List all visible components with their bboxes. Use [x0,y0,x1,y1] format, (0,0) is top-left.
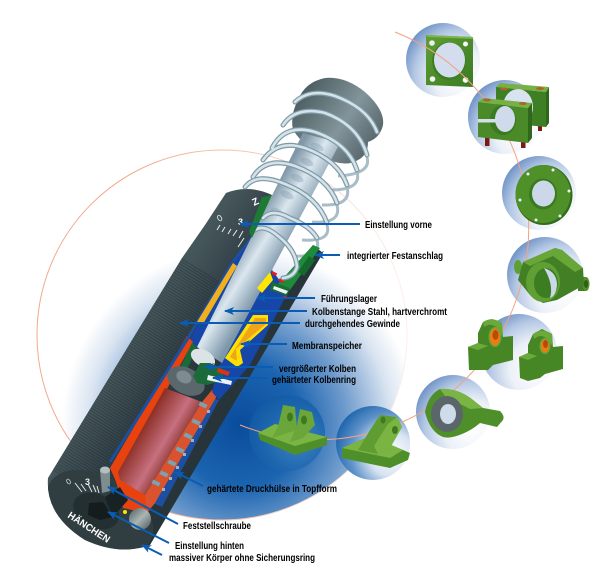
accessory: right bearing block [519,329,563,381]
side grub screw [123,508,151,530]
piston rod [197,133,340,363]
accessory: rod eye [425,389,504,438]
hex adjustment socket [88,502,113,520]
labels [169,220,448,564]
front adjustment scale [215,195,272,247]
labels: gehärtete Druckhülse in Topfform [207,484,337,495]
right wall blue band [153,398,219,507]
labels: integrierter Festanschlag [347,251,443,262]
green piston [193,363,225,385]
labels: Feststellschraube [183,521,251,532]
accessory ring line [240,32,529,440]
base end face [48,470,153,550]
left green seal [180,343,197,372]
accessory: clevis bracket left [258,405,327,455]
spring highlight [245,93,377,278]
accessory backing circles [249,23,583,480]
rear adjustment scale and brand: HÄNCHEN [65,509,113,546]
guide bearing and green end stop [270,245,320,298]
front adjustment scale: 3 [238,217,243,227]
spring front coils [245,93,377,278]
labels: durchgehendes Gewinde [305,319,400,330]
blue interior left of rod [183,236,257,362]
accessory: square flange [426,35,473,87]
hydraulic cylinder [118,388,202,495]
pressure sleeve wall [145,387,222,512]
piston head [162,345,218,402]
front adjustment scale: 0 [215,213,224,224]
labels: massiver Körper ohne Sicherungsring [169,553,315,564]
rear locking screw [100,466,110,493]
top bumper cap [292,78,383,164]
labels: Führungslager [321,294,377,305]
labels: Kolbenstange Stahl, hartverchromt [312,307,448,318]
accessory: round flange [516,165,572,225]
rear adjustment scale and brand: 3 [85,477,90,487]
accessory: left bearing block [468,319,513,370]
rear adjustment scale and brand: 0 [64,476,73,487]
rear adjustment scale and brand [64,476,113,546]
front adjustment scale: Z [251,196,261,209]
absorber body [48,189,323,549]
upper yellow guide piece [257,272,273,293]
labels: vergrößerter Kolben [279,364,356,375]
left yellow seal strip [197,263,237,324]
labels: Einstellung hinten [175,541,244,552]
blue interior beside rod [212,262,288,400]
hardened piston ring [207,368,232,385]
membrane accumulator [225,315,268,367]
accessory: two-part clamps [478,83,549,148]
chamber floor in red-orange [113,472,155,513]
labels: gehärteter Kolbenring [272,375,356,386]
spring back coils [292,157,368,256]
accessory: trunnion mount [514,248,590,303]
thread pattern [85,278,215,490]
dark socket extension [105,487,128,517]
labels: Einstellung vorne [365,220,432,231]
background blue disc with orange outline [37,150,407,520]
spring shadows on rod [269,141,325,218]
labels: Membranspeicher [292,341,362,352]
accessory: clevis bracket right [342,415,410,468]
arrows [108,224,360,555]
left shell wall in red-orange [110,336,193,492]
left blue liner [110,236,253,462]
